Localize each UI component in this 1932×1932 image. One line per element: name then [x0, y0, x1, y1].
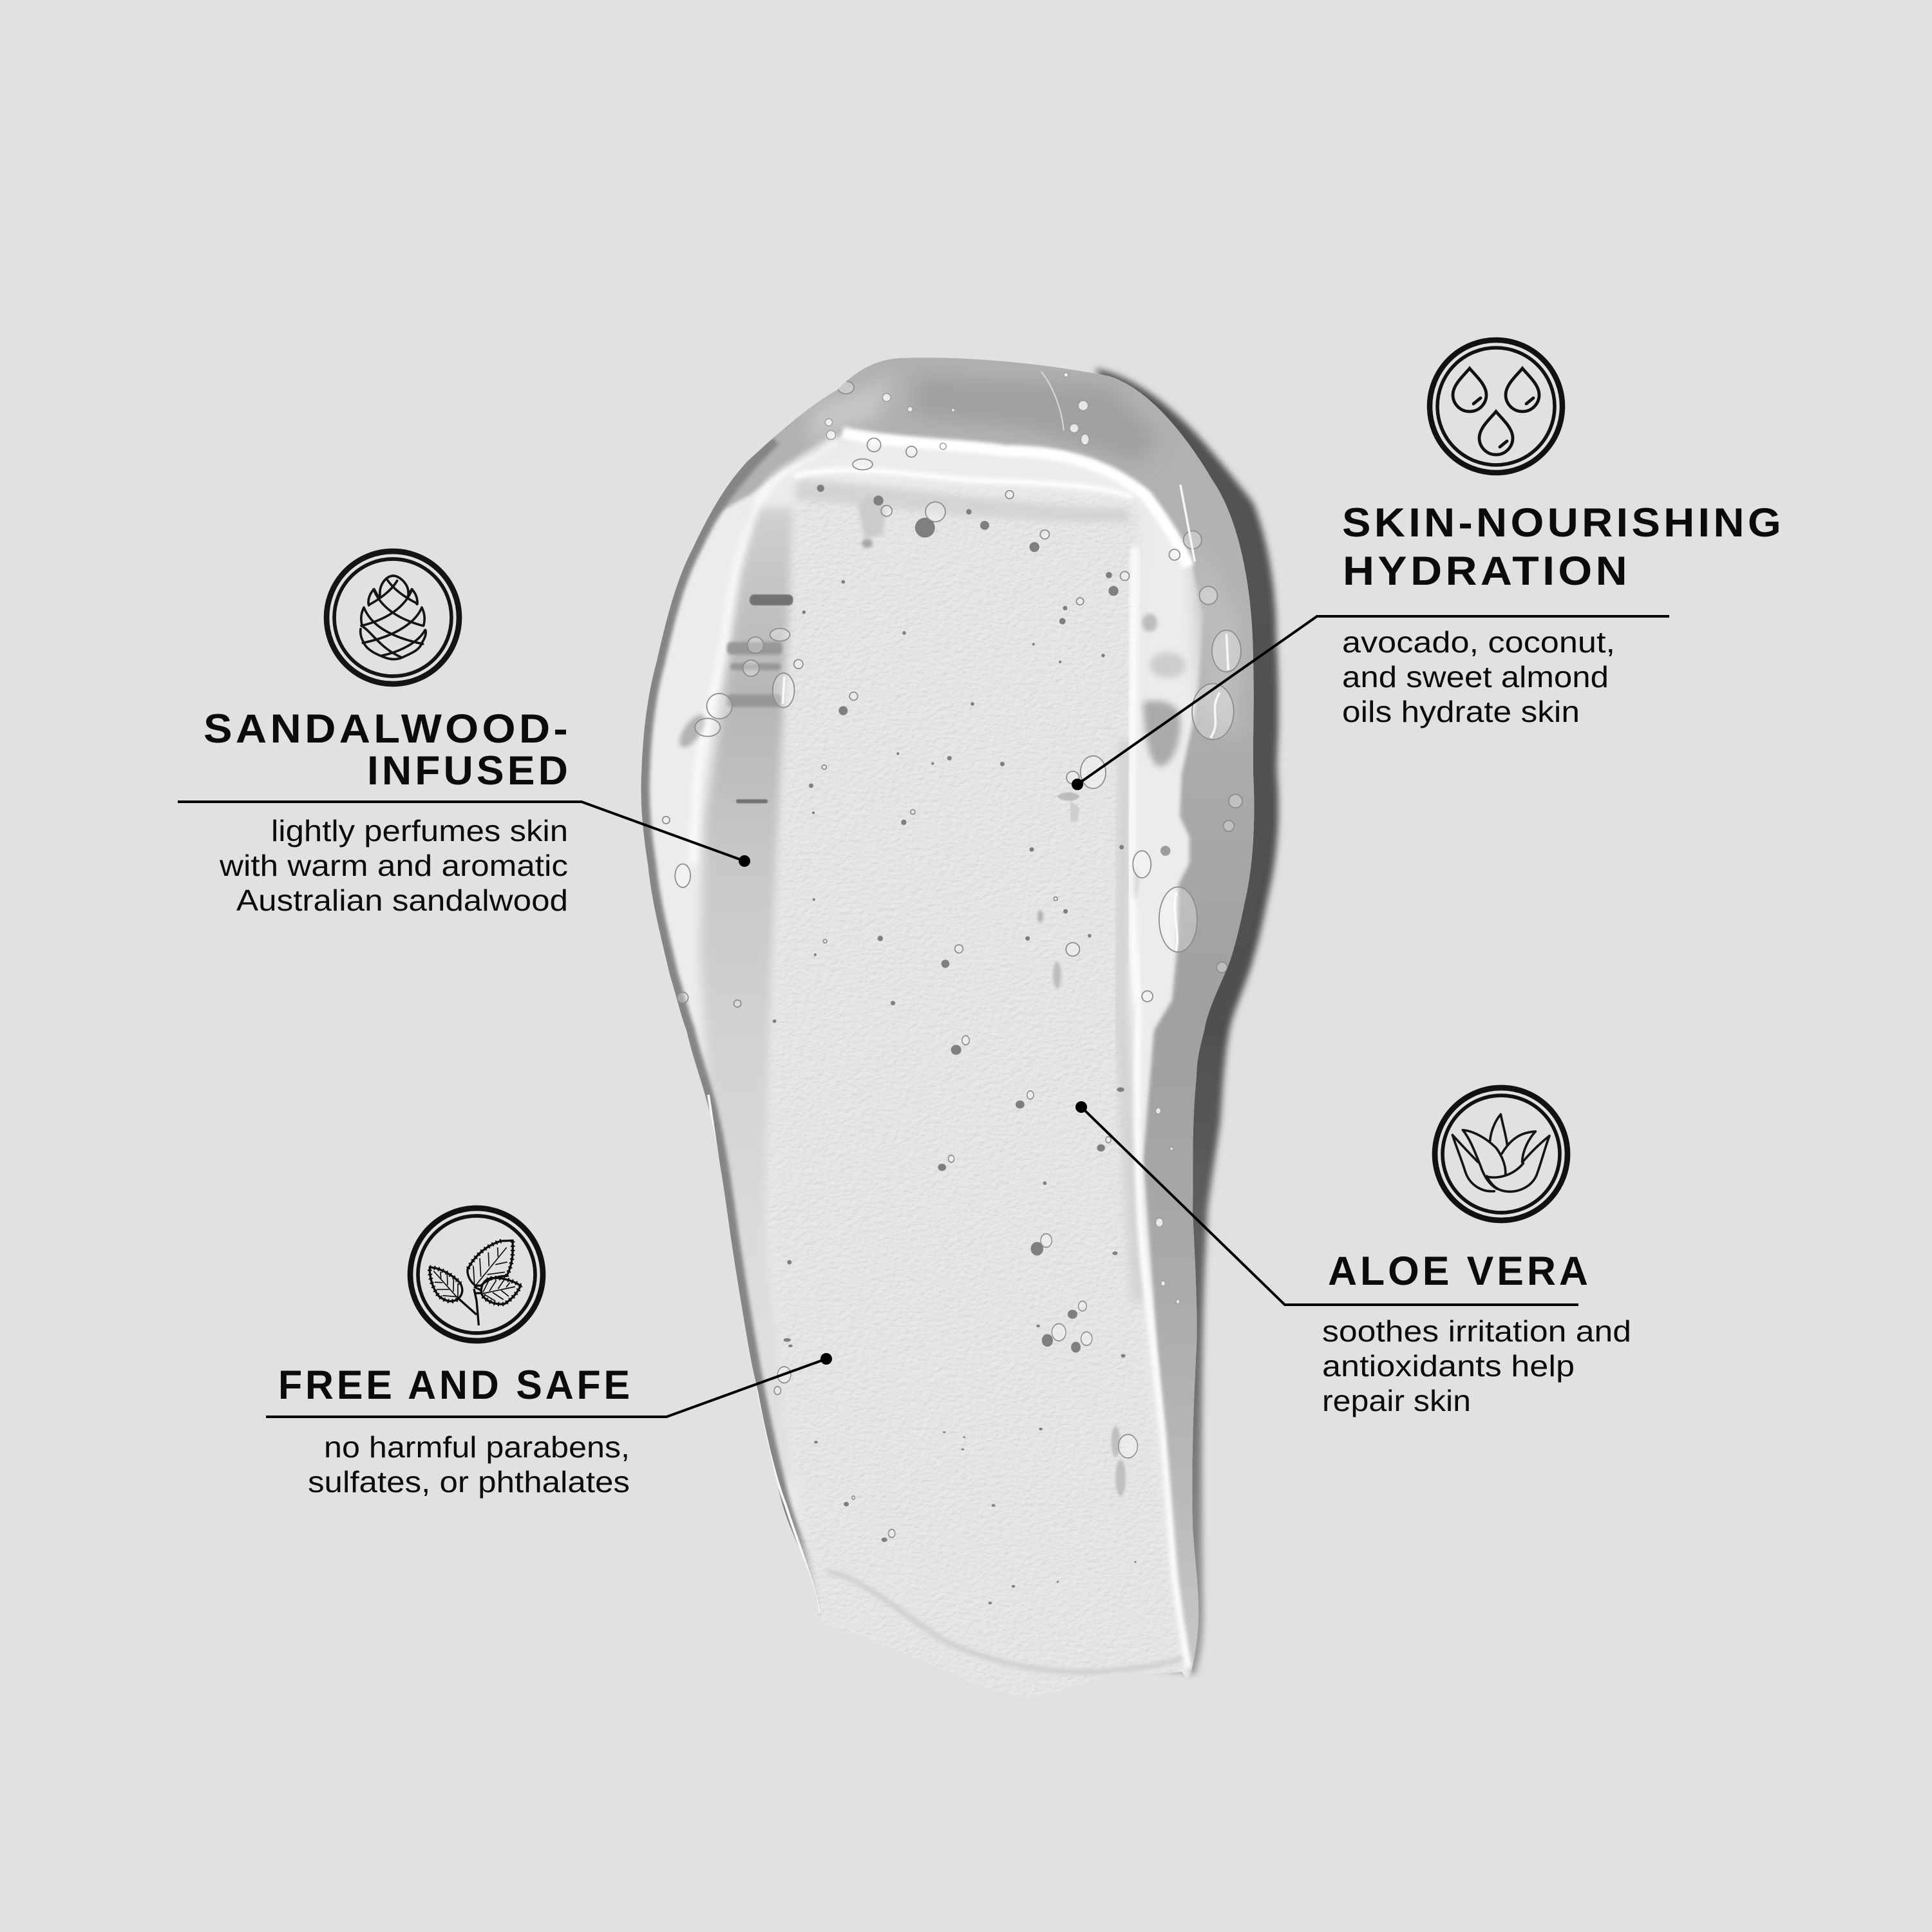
- paper texture: [770, 497, 1176, 1694]
- description: repair skin: [1322, 1384, 1471, 1417]
- leader line: [1075, 1101, 1578, 1305]
- callout: skin-nourishing hydration: [1072, 340, 1785, 790]
- bubbles: [663, 372, 1242, 1007]
- left edge line: [708, 1095, 819, 1613]
- heading: INFUSED: [367, 748, 571, 793]
- translucent blots: [1143, 701, 1180, 766]
- description: Australian sandalwood: [236, 884, 568, 917]
- gel cast shadow: [1095, 368, 1278, 1674]
- leader line: [266, 1353, 832, 1417]
- lower dark specks: [784, 1045, 1137, 1604]
- white highlights: [842, 433, 1188, 567]
- heading: SKIN-NOURISHING: [1342, 500, 1785, 545]
- description: oils hydrate skin: [1342, 695, 1580, 728]
- left rim shade: [641, 438, 819, 1618]
- lower bubbles: [774, 1036, 1180, 1537]
- dark specks: [773, 485, 1170, 1023]
- left glass band: [700, 507, 799, 1481]
- heading: ALOE VERA: [1328, 1249, 1591, 1294]
- paper edge shade: [1121, 741, 1139, 1302]
- icon: aloe plant: [1435, 1088, 1567, 1220]
- top band shading: [914, 377, 1159, 464]
- icon: leaves: [410, 1208, 543, 1341]
- glass band top and right: [710, 357, 1255, 1681]
- icon: pine cone: [327, 551, 459, 684]
- heading: FREE AND SAFE: [278, 1363, 633, 1408]
- description: and sweet almond: [1342, 660, 1609, 694]
- gel body: [641, 357, 1255, 1694]
- gel base ridge: [827, 1571, 1182, 1672]
- description: antioxidants help: [1322, 1349, 1575, 1383]
- description: sulfates, or phthalates: [308, 1465, 630, 1499]
- upper gel details: [663, 372, 1242, 1023]
- streak marks: [675, 496, 886, 803]
- description: lightly perfumes skin: [271, 814, 568, 848]
- description: no harmful parabens,: [324, 1430, 630, 1464]
- heading: HYDRATION: [1343, 549, 1631, 594]
- heading: SANDALWOOD-: [204, 706, 571, 752]
- callout: sandalwood-infused: [178, 551, 750, 917]
- leader line: [1072, 616, 1669, 790]
- lower gel details: [774, 1036, 1180, 1604]
- icon: water drops: [1430, 340, 1562, 473]
- callout: free and safe: [266, 1208, 832, 1499]
- leader line: [178, 802, 750, 867]
- description: with warm and aromatic: [219, 849, 568, 882]
- inner paper: [770, 486, 1186, 1696]
- description: avocado, coconut,: [1342, 625, 1615, 659]
- callout: aloe vera: [1075, 1088, 1631, 1417]
- inner top ridge: [795, 480, 1130, 522]
- description: soothes irritation and: [1322, 1314, 1631, 1348]
- gel swatch: [641, 357, 1283, 1694]
